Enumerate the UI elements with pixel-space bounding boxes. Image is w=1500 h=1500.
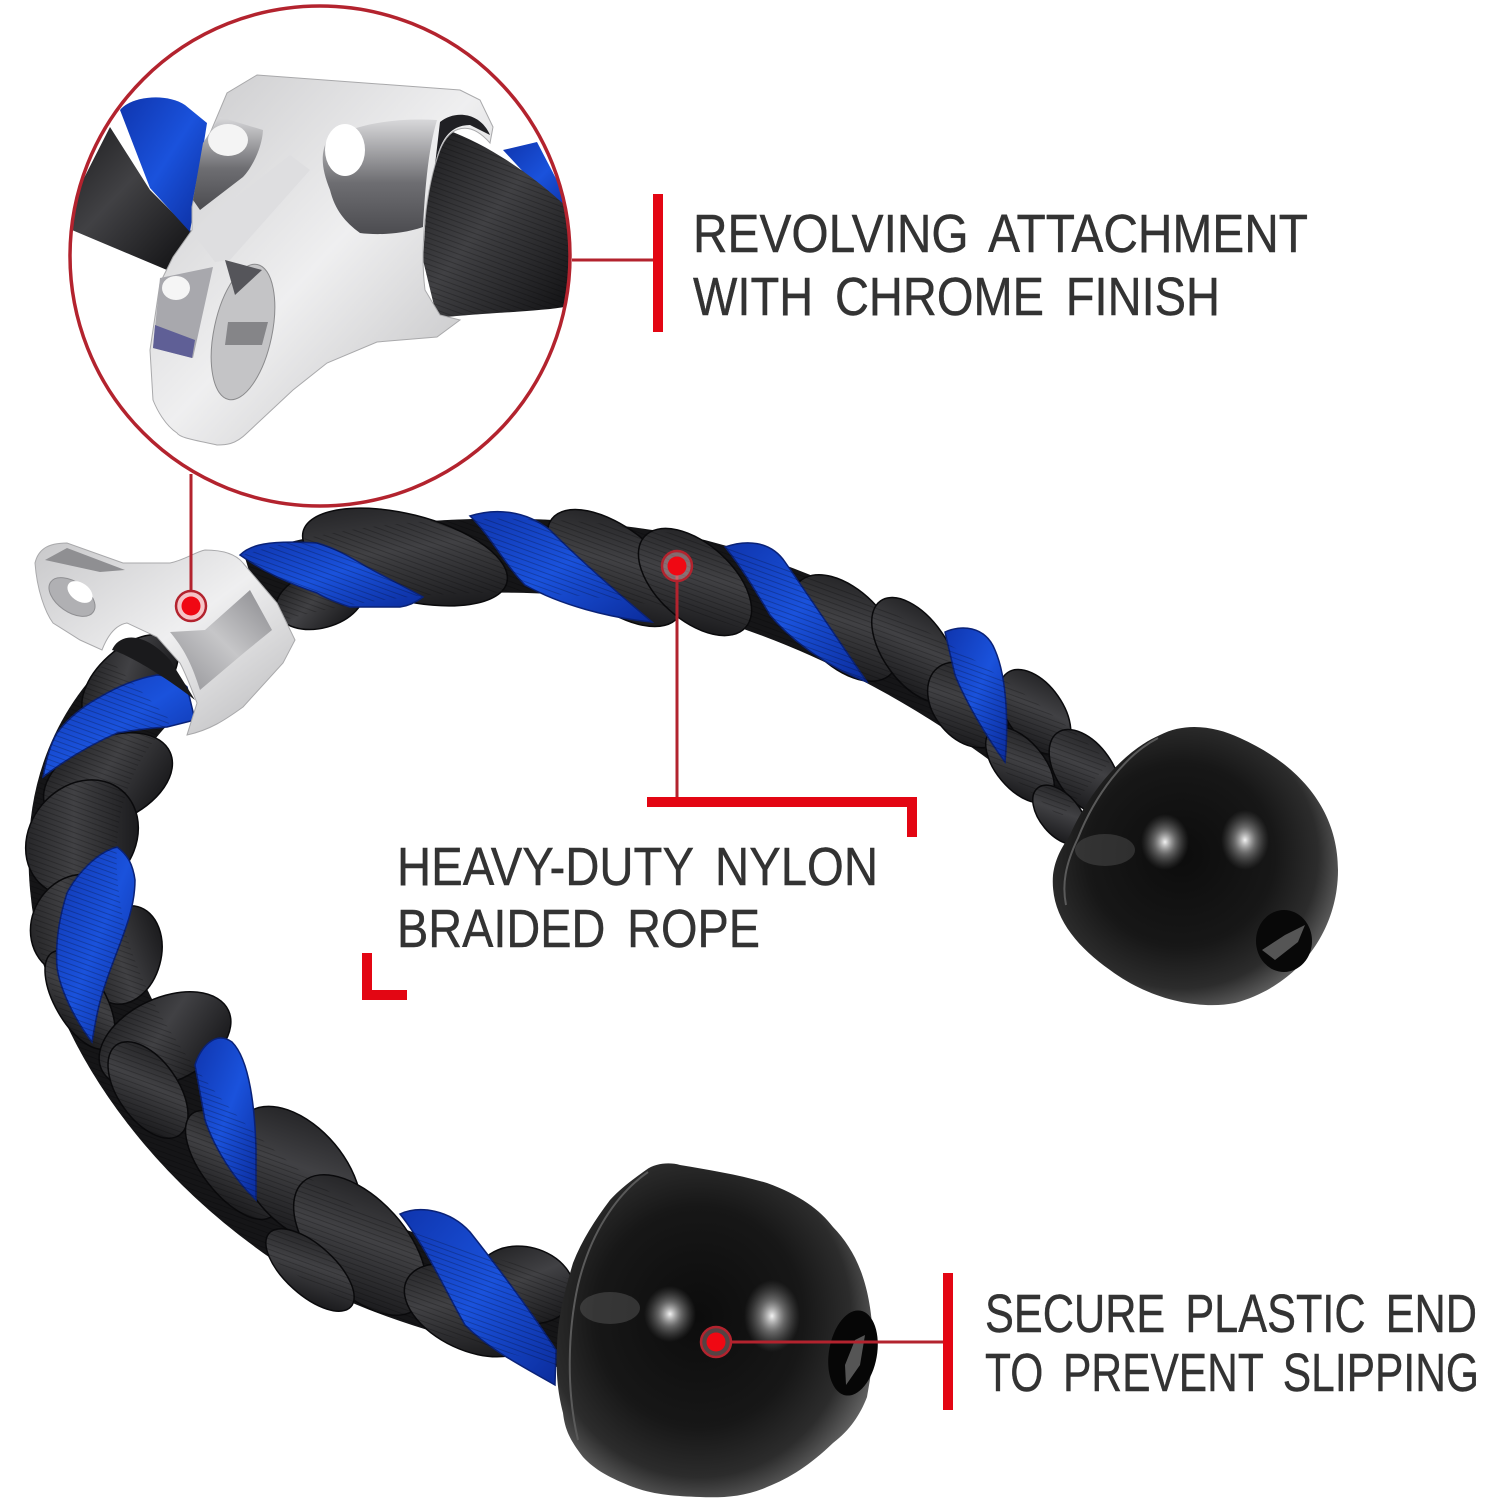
callout: revolving attachment xyxy=(572,194,1308,332)
rope end cap: lower xyxy=(557,1163,884,1497)
chrome attachment on rope xyxy=(35,543,295,735)
magnified rope behind chrome xyxy=(60,97,575,318)
callout text: HEAVY-DUTY NYLON xyxy=(397,837,878,897)
rope xyxy=(2,487,1135,1385)
callout text: BRAIDED ROPE xyxy=(397,899,760,959)
magnified chrome fitting xyxy=(150,75,493,445)
blue strands of the rope xyxy=(43,512,1007,1385)
rope end cap: upper xyxy=(1053,727,1338,1005)
callout text: WITH CHROME FINISH xyxy=(693,267,1220,327)
circle outline xyxy=(70,6,570,506)
leader and marker: attachment xyxy=(176,474,206,621)
callout text xyxy=(985,1284,1479,1403)
callout: nylon rope xyxy=(367,551,912,995)
black strands of the rope xyxy=(2,487,1135,1376)
callout: plastic end xyxy=(701,1273,1479,1410)
callout text: REVOLVING ATTACHMENT xyxy=(693,204,1308,264)
callout text xyxy=(693,204,1308,327)
zoom detail circle xyxy=(60,6,575,506)
callout text xyxy=(397,837,878,959)
